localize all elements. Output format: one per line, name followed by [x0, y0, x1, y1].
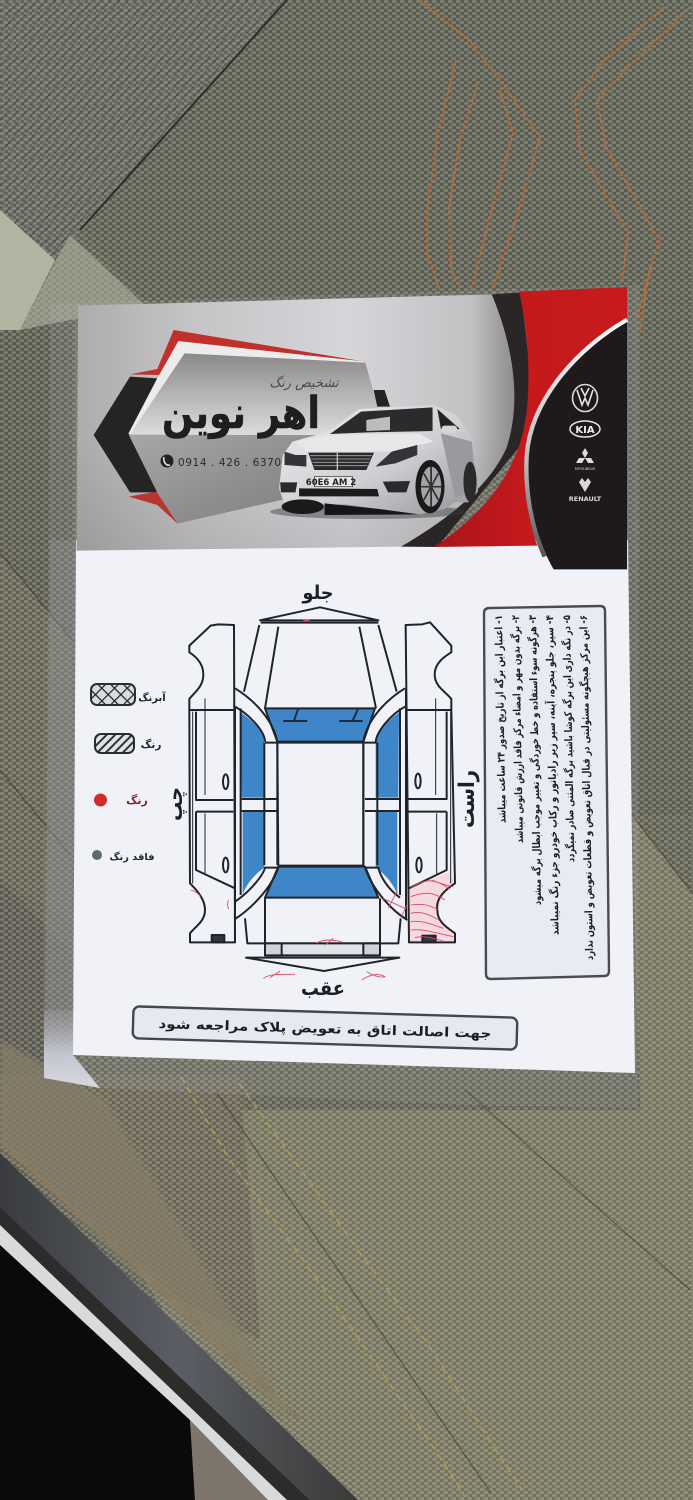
badge white frame [128, 341, 366, 434]
term 4: ۴- سپر، جلو پنجره، آینه، سپر زیر رادیاتور و رکاب خودرو جزء رنگ نمیباشد [543, 614, 562, 935]
legend: gray dot [92, 850, 102, 860]
rear bumper [246, 943, 399, 971]
left door frame and pillars [235, 688, 278, 919]
logo: Renault: RENAULT [569, 495, 602, 503]
roof [277, 743, 363, 866]
licence plate text: 60E6 AM 2 [306, 478, 356, 488]
pink hatch on right rear quarter [410, 872, 455, 942]
car floor shadow [270, 504, 466, 519]
label: rear: عقب [301, 976, 345, 1000]
legend: red dot [94, 794, 107, 806]
logo: Mitsubishi: MITSUBISHI [575, 467, 595, 471]
left side panel [189, 624, 235, 942]
header banner [77, 287, 627, 569]
right side panel [406, 622, 455, 942]
bottom note pill [133, 1006, 517, 1050]
gray banner background [77, 294, 514, 551]
legend label: red paint: رنگ [126, 793, 148, 807]
card [73, 287, 635, 1073]
label: right side: راست [455, 770, 480, 828]
legend: paint hatch [95, 734, 134, 753]
badge lower shade [129, 435, 321, 524]
term 6: ۶- این مرکز هیچگونه مسئولیتی در قبال اتاق تعویض و قطعات تعویض و استون ندارد [577, 615, 596, 960]
badge black chevron [94, 377, 157, 492]
red curved panel [434, 287, 627, 547]
white card sheet [73, 540, 635, 1073]
phone number: 0914 . 426 . 6370 [178, 457, 282, 469]
legend label: paint: رنگ [141, 738, 161, 751]
logo: KIA [570, 421, 600, 437]
term 3: ۳- هرگونه سوء استفاده و خط خوردگی و تغییر موجب ابطال برگه میشود [526, 614, 544, 905]
right door frame and pillars [363, 688, 407, 920]
terms box [484, 606, 609, 979]
logo: Mitsubishi [575, 448, 595, 471]
silver swoosh [526, 320, 627, 557]
logo: Volkswagen [572, 384, 598, 412]
silver car [279, 405, 478, 515]
legend label: aberang: آبرنگ [138, 691, 166, 704]
clear laminate sleeve [44, 285, 640, 1108]
note text: جهت اصالت اتاق به تعویض پلاک مراجعه شود [158, 1017, 492, 1042]
phone icon [160, 454, 174, 468]
rear window and boot [245, 867, 401, 943]
car door sill and dark interior [0, 1140, 358, 1500]
car body diagram [189, 607, 455, 980]
term 1: ۱- اعتبار این برگه از تاریخ صدور ۲۴ ساعت میباشد [492, 615, 509, 823]
badge upper shade [130, 353, 379, 435]
term 5: ۵- در نگه داری این برگه کوشا باشید برگه المثنی صادر نمیگردد [560, 615, 577, 862]
hood and front bumper [244, 607, 397, 742]
red hand marks [191, 620, 453, 980]
lower seat stitching [181, 1077, 522, 1497]
legend label: no paint: فاقد رنگ [110, 851, 154, 863]
label: front: جلو [302, 582, 334, 604]
laminate bottom left corner [44, 1010, 100, 1088]
badge red bottom stripe [129, 492, 178, 524]
badge red top stripe [130, 330, 361, 375]
dark curved band [401, 292, 532, 547]
legend: aberang crosshatch [91, 684, 135, 705]
orange seat stitching [420, 0, 690, 330]
legend [91, 684, 166, 863]
blue windows [241, 708, 399, 898]
logo: KIA: KIA [575, 425, 595, 436]
subtitle: تشخیص رنگ [269, 375, 340, 391]
term 2: ۲- برگه بدون مهر و امضاء مرکز فاقد ارزش قانونی میباشد [509, 615, 526, 843]
title: اهر نوین [162, 388, 320, 439]
badge dark tab [374, 390, 390, 407]
terms box frame [484, 606, 609, 979]
black logo panel [527, 321, 627, 569]
laminate left strip [44, 540, 100, 1088]
label: left side: چپ [163, 787, 187, 821]
logo: Renault [569, 478, 602, 503]
